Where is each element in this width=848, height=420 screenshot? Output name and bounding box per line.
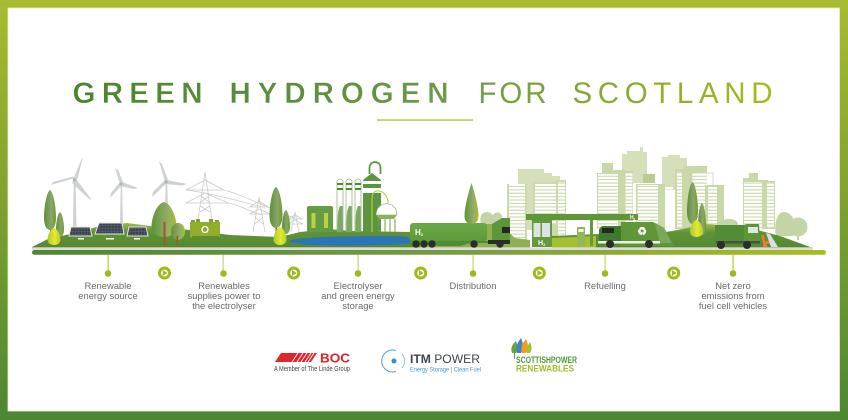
hydrogen tanker truck bbox=[410, 218, 510, 248]
refuelling station bbox=[526, 214, 638, 247]
step 3: electrolyser and storage: storage bbox=[342, 300, 374, 311]
step 2: renewables supplies power bbox=[188, 255, 260, 311]
step 3: electrolyser and storage bbox=[321, 255, 395, 311]
refuelling station: 2 bbox=[634, 217, 636, 221]
electricity pylons bbox=[186, 172, 303, 232]
illustration: green hydrogen value chain bbox=[32, 147, 826, 255]
arrow 1 bbox=[160, 268, 170, 278]
title divider bbox=[377, 119, 473, 121]
step 6: net zero emissions bbox=[699, 255, 767, 311]
arrow 4 bbox=[534, 268, 544, 278]
logo: ITM Power bbox=[382, 350, 481, 374]
solar panels bbox=[69, 223, 148, 240]
hills bbox=[32, 223, 813, 248]
step 2: renewables supplies power: the electrolyser bbox=[192, 300, 256, 311]
wind turbines bbox=[51, 157, 187, 227]
logo: ScottishPower Renewables: RENEWABLES bbox=[516, 364, 574, 374]
logo: ITM Power: Energy Storage | Clean Fuel bbox=[410, 366, 481, 374]
background city bbox=[507, 147, 775, 240]
title: HYDROGEN bbox=[230, 77, 448, 110]
arrow 2 bbox=[289, 268, 299, 278]
bushes bbox=[480, 212, 808, 240]
arrow 3 bbox=[416, 268, 426, 278]
step 6: net zero emissions: fuel cell vehicles bbox=[699, 300, 767, 311]
arrow 5 bbox=[669, 268, 679, 278]
middle poplar tree bbox=[464, 183, 478, 224]
step 2: renewables supplies power: supplies power to bbox=[188, 290, 260, 301]
title: SCOTLAND bbox=[572, 77, 772, 110]
transformer bbox=[190, 219, 220, 239]
water bbox=[290, 236, 412, 246]
logo: ScottishPower Renewables: SCOTTISHPOWER bbox=[516, 355, 577, 366]
refuelling station: H bbox=[538, 240, 543, 247]
street cleaning splash bbox=[761, 233, 778, 247]
logo: BOC: A Member of The Linde Group bbox=[274, 366, 350, 373]
hydrogen tanker truck: H bbox=[415, 228, 421, 237]
step 1: renewable energy source bbox=[78, 255, 138, 301]
step 3: electrolyser and storage: Electrolyser bbox=[334, 280, 382, 291]
step 6: net zero emissions: Net zero bbox=[715, 280, 751, 291]
step 1: renewable energy source: energy source bbox=[78, 290, 138, 301]
step 3: electrolyser and storage: and green energy bbox=[321, 290, 395, 301]
hydrogen tanker truck: 2 bbox=[421, 232, 424, 237]
logo: BOC: BOC bbox=[320, 350, 351, 366]
step 5: refuelling: Refuelling bbox=[584, 280, 626, 291]
refuelling station: 2 bbox=[543, 242, 546, 247]
recycling truck: ♻ bbox=[637, 226, 647, 238]
electrolyser plant bbox=[307, 162, 397, 232]
right trees bbox=[687, 182, 706, 237]
step 4: distribution: Distribution bbox=[450, 280, 496, 291]
step 6: net zero emissions: emissions from bbox=[701, 290, 765, 301]
logo: ITM Power: ITM POWER bbox=[410, 352, 480, 366]
road and base band bbox=[32, 247, 826, 255]
title: FOR bbox=[478, 77, 546, 110]
title bbox=[72, 77, 772, 110]
hydrogen service truck bbox=[715, 224, 760, 249]
step 2: renewables supplies power: Renewables bbox=[198, 280, 250, 291]
recycling truck bbox=[598, 222, 675, 248]
step 1: renewable energy source: Renewable bbox=[85, 280, 131, 291]
logo: BOC bbox=[274, 350, 351, 373]
step 5: refuelling bbox=[584, 255, 626, 291]
title: GREEN bbox=[72, 77, 202, 110]
left trees bbox=[44, 187, 290, 246]
step 4: distribution bbox=[450, 255, 496, 291]
logo: ScottishPower Renewables bbox=[511, 338, 577, 374]
refuelling station: H bbox=[630, 215, 634, 221]
